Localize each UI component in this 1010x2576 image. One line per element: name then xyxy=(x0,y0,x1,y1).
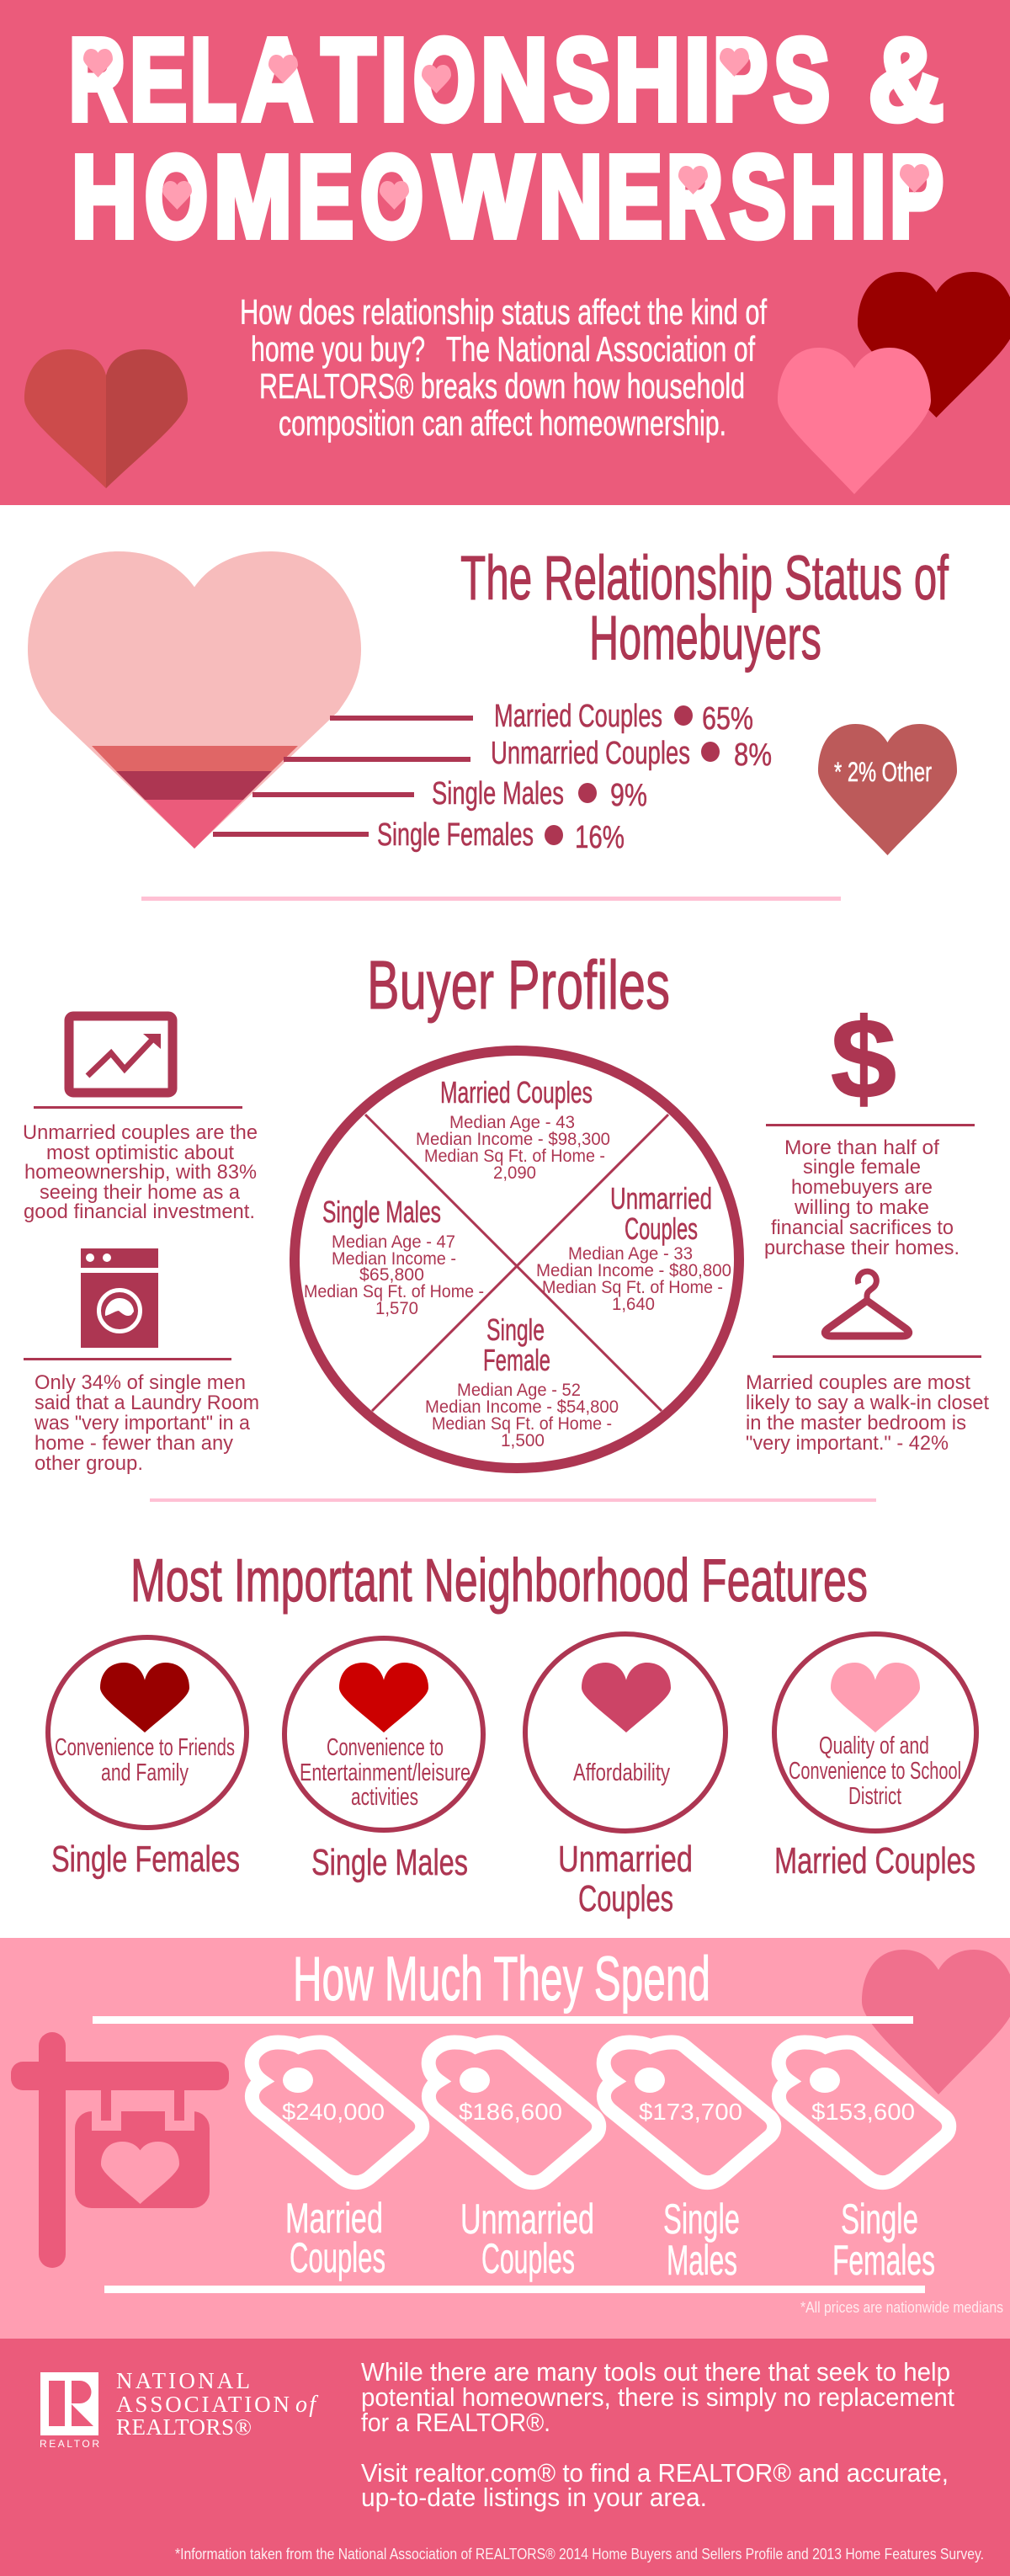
text: single men: Only 34% of single men xyxy=(35,1371,246,1394)
text: married couples xyxy=(746,1371,989,1455)
closing text: Visit realtor.com® to find a REALTOR® and accurate, xyxy=(361,2458,949,2488)
title: S xyxy=(773,15,830,145)
title: E xyxy=(130,15,187,145)
price tag: married couples: $240,000 xyxy=(282,2099,385,2125)
title: O xyxy=(413,15,476,145)
wheel: single female: Single xyxy=(486,1312,545,1347)
closing text: up-to-date listings in your area. xyxy=(361,2483,707,2512)
text: single female: purchase their homes. xyxy=(764,1237,960,1259)
wheel: unmarried couples: Couples xyxy=(625,1211,698,1246)
panel: how much they spend xyxy=(0,1938,1010,2339)
wheel: unmarried couples xyxy=(536,1181,731,1314)
wheel: single female: Median Income - $54,800 xyxy=(425,1397,619,1417)
text: single men: home - fewer than any xyxy=(35,1432,233,1455)
title: W xyxy=(434,132,534,262)
wheel: single males: Median Sq Ft. of Home - xyxy=(304,1282,484,1301)
price tag: married couples: Couples xyxy=(290,2234,385,2281)
title: N xyxy=(481,15,548,145)
feature: single females: Single Females xyxy=(51,1839,240,1880)
price tag: single males: $173,700 xyxy=(639,2099,742,2125)
feature: married couples xyxy=(774,1634,976,1881)
price tag: single females: Females xyxy=(832,2237,935,2284)
heading: How Much They Spend xyxy=(293,1944,710,2014)
price tag: single males: Single xyxy=(663,2195,740,2243)
text: single female: willing to make xyxy=(794,1196,929,1219)
legend: unmarried couples: Unmarried Couples xyxy=(491,736,690,771)
icon: hanging sign xyxy=(11,2032,229,2268)
price tag: married couples: Married xyxy=(285,2195,383,2242)
feature: single males: activities xyxy=(351,1784,418,1811)
text: married couples: Married couples are most xyxy=(746,1371,970,1394)
wheel: single female: Median Sq Ft. of Home - xyxy=(432,1414,612,1434)
legend: married couples xyxy=(330,699,753,737)
intro text: composition can affect homeownership. xyxy=(279,403,726,443)
panel: relationship status xyxy=(28,543,957,855)
feature: unmarried couples xyxy=(525,1634,726,1919)
text: married couples: likely to say a walk-in closet xyxy=(746,1392,989,1414)
legend: unmarried couples: 8% xyxy=(734,737,772,773)
title: P xyxy=(713,15,768,145)
title: & xyxy=(869,15,944,145)
feature: unmarried couples: Couples xyxy=(578,1878,673,1919)
icon: chart xyxy=(69,1016,173,1093)
text: single female: homebuyers are xyxy=(791,1176,933,1199)
text: unmarried couples: seeing their home as a xyxy=(40,1181,241,1204)
legend: unmarried couples xyxy=(284,736,772,773)
legend: single males: Single Males xyxy=(432,776,564,812)
chart: heart shares xyxy=(28,551,361,849)
text: single men: was "very important" in a xyxy=(34,1412,251,1434)
text: single men xyxy=(34,1371,259,1475)
logo: REALTOR xyxy=(40,2438,99,2450)
price tag: unmarried couples xyxy=(428,2042,599,2282)
feature: single males: Convenience to xyxy=(327,1734,444,1761)
text: single men: said that a Laundry Room xyxy=(35,1392,259,1414)
text: unmarried couples: most optimistic about xyxy=(46,1142,234,1164)
feature: single females xyxy=(48,1637,247,1880)
closing text: While there are many tools out there that seek to help xyxy=(361,2357,950,2387)
icon: hanger xyxy=(825,1271,909,1336)
legend: single males: 9% xyxy=(610,778,647,813)
feature: single females: and Family xyxy=(101,1759,189,1786)
logo: ASSOCIATION xyxy=(116,2392,290,2417)
panel: header xyxy=(0,0,1010,505)
price tag: unmarried couples: $186,600 xyxy=(459,2099,562,2125)
title: O xyxy=(360,132,423,262)
title: M xyxy=(214,132,292,262)
title: I xyxy=(684,15,710,145)
title: P xyxy=(890,132,944,262)
icon: dollar: $ xyxy=(831,995,896,1122)
text: unmarried couples: good financial investment. xyxy=(24,1200,255,1223)
title: H xyxy=(72,132,137,262)
wheel: unmarried couples: Median Income - $80,800 xyxy=(536,1261,731,1280)
title xyxy=(69,15,944,262)
wheel: married couples: 2,090 xyxy=(493,1163,536,1183)
text: single female: financial sacrifices to xyxy=(771,1216,954,1239)
legend: single females xyxy=(213,817,625,855)
feature: unmarried couples: Affordability xyxy=(573,1759,670,1786)
wheel: married couples: Median Age - 43 xyxy=(449,1113,575,1132)
text: single female: single female xyxy=(803,1156,921,1179)
panel: footer xyxy=(0,2339,1010,2576)
wheel: single males: Single Males xyxy=(322,1195,441,1229)
heading: Homebuyers xyxy=(589,603,821,673)
legend: married couples: 65% xyxy=(702,701,753,737)
logo xyxy=(40,2368,318,2450)
intro text: home you buy? The National Association of xyxy=(251,329,755,369)
title: T xyxy=(322,15,375,145)
intro text: REALTORS® breaks down how household xyxy=(259,366,745,406)
chart: profile wheel xyxy=(295,1051,739,1468)
title: S xyxy=(554,15,610,145)
callout: 2% other heart xyxy=(818,724,957,855)
icon: washing machine xyxy=(81,1248,158,1348)
price tag: single females: Single xyxy=(841,2195,918,2243)
closing text: potential homeowners, there is simply no replacement xyxy=(361,2382,954,2412)
closing text xyxy=(361,2357,954,2512)
feature: married couples: Quality of and xyxy=(819,1732,929,1759)
wheel: single female: 1,500 xyxy=(501,1431,545,1450)
title: O xyxy=(145,132,208,262)
title: R xyxy=(667,132,723,262)
wheel: single males: Median Age - 47 xyxy=(332,1232,455,1252)
wheel: single males: Median Income - xyxy=(332,1249,456,1269)
text: single men: other group. xyxy=(35,1452,143,1475)
wheel: unmarried couples: Median Sq Ft. of Home - xyxy=(542,1278,723,1297)
price tag: married couples xyxy=(252,2042,423,2281)
text: unmarried couples: Unmarried couples are the xyxy=(23,1121,258,1144)
title: I xyxy=(860,132,886,262)
text: unmarried couples xyxy=(23,1121,258,1223)
feature: single males xyxy=(284,1638,483,1883)
intro text xyxy=(240,292,767,443)
logo: REALTORS® xyxy=(116,2414,252,2440)
legend: married couples: Married Couples xyxy=(494,699,662,734)
callout: 2% other heart: * 2% Other xyxy=(834,757,932,787)
icon: background heart xyxy=(862,1950,1010,2094)
legend: single females: Single Females xyxy=(377,817,534,853)
price tag: unmarried couples: Unmarried xyxy=(460,2195,594,2243)
title: E xyxy=(606,132,662,262)
title: E xyxy=(297,132,354,262)
wheel: single males xyxy=(304,1195,484,1318)
text: unmarried couples: homeownership, with 83% xyxy=(24,1161,257,1184)
title: L xyxy=(190,15,237,145)
text: married couples: in the master bedroom is xyxy=(746,1412,966,1434)
panel: neighborhood features xyxy=(48,1547,976,1919)
icon: dark red heart xyxy=(858,272,1010,418)
price tag: single males: Males xyxy=(667,2237,737,2284)
logo: of xyxy=(295,2392,318,2418)
price tag: single females xyxy=(779,2042,949,2284)
price tag: unmarried couples: Couples xyxy=(481,2235,575,2282)
legend: single females: 16% xyxy=(575,820,625,855)
wheel: single female xyxy=(425,1312,619,1450)
title: S xyxy=(730,132,786,262)
wheel: married couples xyxy=(416,1075,610,1183)
title: I xyxy=(380,15,407,145)
feature: single females: Convenience to Friends xyxy=(55,1734,235,1761)
heading: Buyer Profiles xyxy=(367,947,670,1024)
text: married couples: "very important." - 42% xyxy=(746,1432,949,1455)
title: A xyxy=(242,15,312,145)
text: single female xyxy=(764,1136,960,1259)
title: H xyxy=(790,132,856,262)
wheel: married couples: Median Income - $98,300 xyxy=(416,1130,610,1149)
feature: single males: Single Males xyxy=(311,1842,468,1883)
feature: single males: Entertainment/leisure xyxy=(300,1759,470,1786)
title: H xyxy=(614,15,680,145)
title: R xyxy=(69,15,125,145)
logo: NATIONAL xyxy=(116,2368,250,2393)
icon: folded red heart xyxy=(24,349,188,488)
text: single female: More than half of xyxy=(784,1136,939,1159)
wheel: married couples: Median Sq Ft. of Home - xyxy=(424,1147,605,1166)
icon: pink heart xyxy=(778,348,931,494)
price tag: single males xyxy=(603,2042,774,2284)
wheel: single female: Median Age - 52 xyxy=(457,1381,581,1400)
wheel: single female: Female xyxy=(483,1343,550,1377)
wheel: unmarried couples: Median Age - 33 xyxy=(568,1244,693,1264)
intro text: How does relationship status affect the kind of xyxy=(240,292,767,332)
legend: single males xyxy=(252,776,647,813)
wheel: unmarried couples: 1,640 xyxy=(612,1295,655,1314)
title: N xyxy=(539,132,603,262)
wheel: unmarried couples: Unmarried xyxy=(610,1181,712,1216)
wheel: single males: 1,570 xyxy=(375,1299,418,1318)
closing text: for a REALTOR®. xyxy=(361,2408,550,2437)
wheel: married couples: Married Couples xyxy=(440,1075,593,1110)
heading xyxy=(460,543,949,673)
price tag: single females: $153,600 xyxy=(811,2099,915,2125)
feature: married couples: District xyxy=(848,1783,901,1810)
wheel: single males: $65,800 xyxy=(359,1265,424,1285)
feature: unmarried couples: Unmarried xyxy=(558,1839,693,1880)
panel: buyer profiles xyxy=(23,947,989,1475)
